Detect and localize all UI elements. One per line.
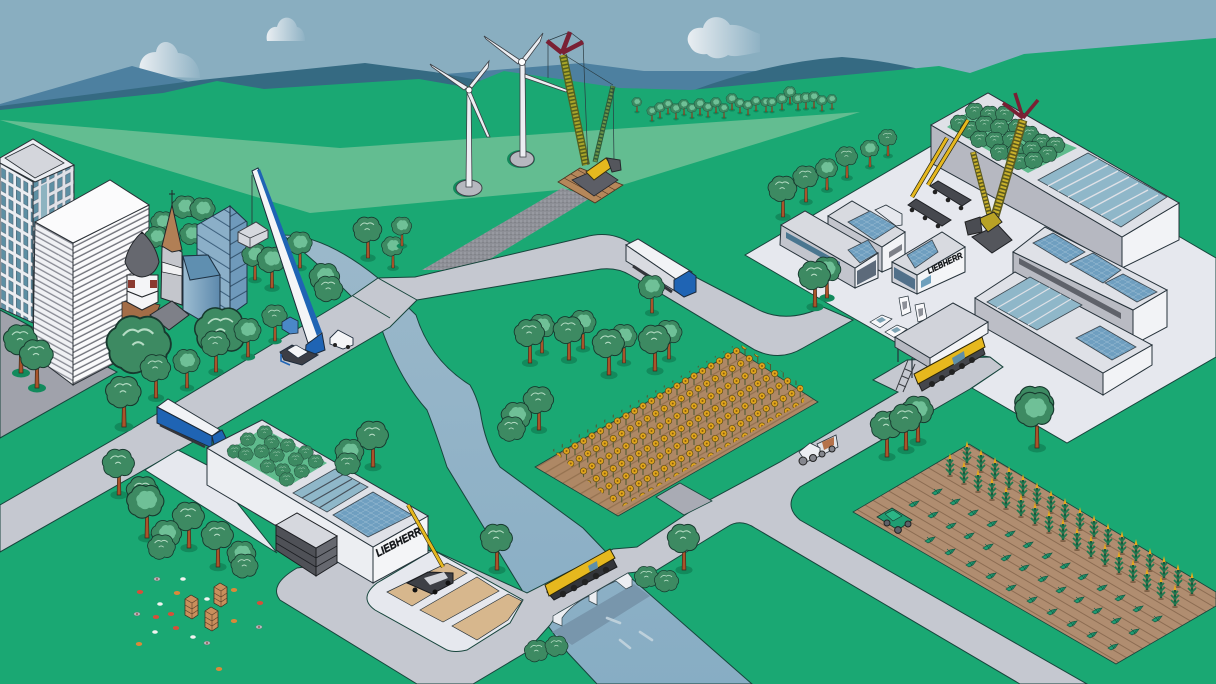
parking and storage area — [367, 550, 523, 652]
upper road and river bridge — [0, 235, 853, 552]
LIEBHERR sign: LIEBHERR — [925, 250, 965, 276]
large green-roof factory — [931, 93, 1179, 268]
left factory apron — [145, 450, 277, 553]
grey container block — [276, 513, 337, 576]
mobile crane lifting load — [238, 168, 325, 365]
crane carrier — [305, 333, 325, 358]
wildflowers — [134, 577, 263, 671]
sunflowers — [552, 343, 804, 508]
truck chassis — [908, 199, 951, 226]
central orchard trees — [498, 275, 682, 441]
seedlings — [909, 489, 1162, 650]
small crane at storage pads — [407, 505, 453, 594]
telescopic boom — [252, 168, 322, 343]
mountain: centre light — [445, 63, 765, 100]
maroon head — [1003, 93, 1038, 118]
grey canopy hall — [895, 303, 988, 378]
solar strips — [1038, 153, 1167, 227]
yellow mobile crane at hall — [914, 337, 985, 391]
skyscraper rear — [0, 139, 74, 323]
lower road network — [276, 357, 1087, 684]
distant trees — [632, 87, 837, 122]
white tractor with trailer — [799, 435, 838, 465]
bottom-left trees — [102, 421, 512, 578]
LIEBHERR sign: LIEBHERR — [374, 526, 424, 560]
maroon head — [547, 32, 583, 53]
gravel path — [422, 188, 592, 270]
storage pads — [387, 563, 522, 640]
sky — [0, 0, 1216, 140]
luffing mast — [595, 86, 613, 162]
office building B — [828, 201, 905, 272]
site toilet box — [282, 317, 298, 334]
church spire tower — [161, 190, 182, 305]
beehives — [185, 583, 227, 631]
mountain: left light — [0, 66, 190, 112]
third solar hall — [975, 272, 1152, 395]
church onion tower — [122, 232, 160, 328]
skyscraper front — [33, 180, 149, 385]
mountains — [0, 57, 960, 125]
load cable — [251, 175, 253, 225]
Liebherr service building — [892, 232, 965, 294]
charging stations — [899, 296, 927, 322]
stone bridge arches — [552, 573, 652, 648]
green roof planting — [947, 103, 1077, 173]
wind turbine 1 — [430, 61, 490, 197]
trees behind church — [145, 196, 215, 248]
hanging box — [238, 222, 268, 248]
rigging — [547, 32, 614, 165]
solar panel array — [333, 492, 412, 537]
bridge-side trees and bushes — [524, 524, 699, 662]
roof planting — [227, 426, 327, 487]
second solar hall — [1013, 227, 1167, 345]
lifted blade — [525, 74, 568, 92]
crawler base — [972, 225, 1012, 253]
pale green clearing — [0, 112, 860, 213]
crawler body — [572, 168, 618, 196]
river — [283, 235, 752, 684]
bridge seams — [353, 278, 417, 318]
city large trees — [3, 217, 412, 432]
solar strips — [293, 469, 368, 512]
right factory site — [745, 110, 1216, 443]
wind turbine 2 — [484, 33, 568, 168]
cloud left — [139, 42, 200, 78]
access ladder — [896, 360, 915, 392]
yellow crane crossing bridge — [545, 549, 617, 600]
mountain: right dark — [694, 57, 960, 90]
truck on upper road — [626, 239, 696, 297]
vegetable and corn field — [853, 441, 1216, 664]
main boom — [563, 55, 586, 165]
left Liebherr factory — [207, 420, 428, 583]
green field robot — [877, 508, 912, 533]
support van — [330, 330, 353, 349]
cloud right — [688, 17, 760, 58]
large lattice crane in yard — [965, 93, 1038, 253]
crop access pad — [656, 483, 712, 515]
blue glass office — [183, 206, 247, 320]
crawler crane at wind farm — [547, 32, 623, 203]
right side trees — [768, 130, 1054, 461]
sunflower field — [535, 343, 818, 516]
chapel roof — [150, 301, 189, 330]
corn plants — [946, 441, 1196, 608]
grey city ground — [0, 310, 117, 438]
mountain: left dark band — [0, 63, 500, 125]
office building A — [780, 211, 878, 288]
fish — [607, 618, 652, 648]
cloud small — [267, 18, 305, 41]
parked cars — [870, 315, 907, 338]
timber mats — [558, 168, 623, 203]
yellow cranes in yard — [908, 120, 971, 228]
truck on lower-left road — [157, 399, 227, 449]
